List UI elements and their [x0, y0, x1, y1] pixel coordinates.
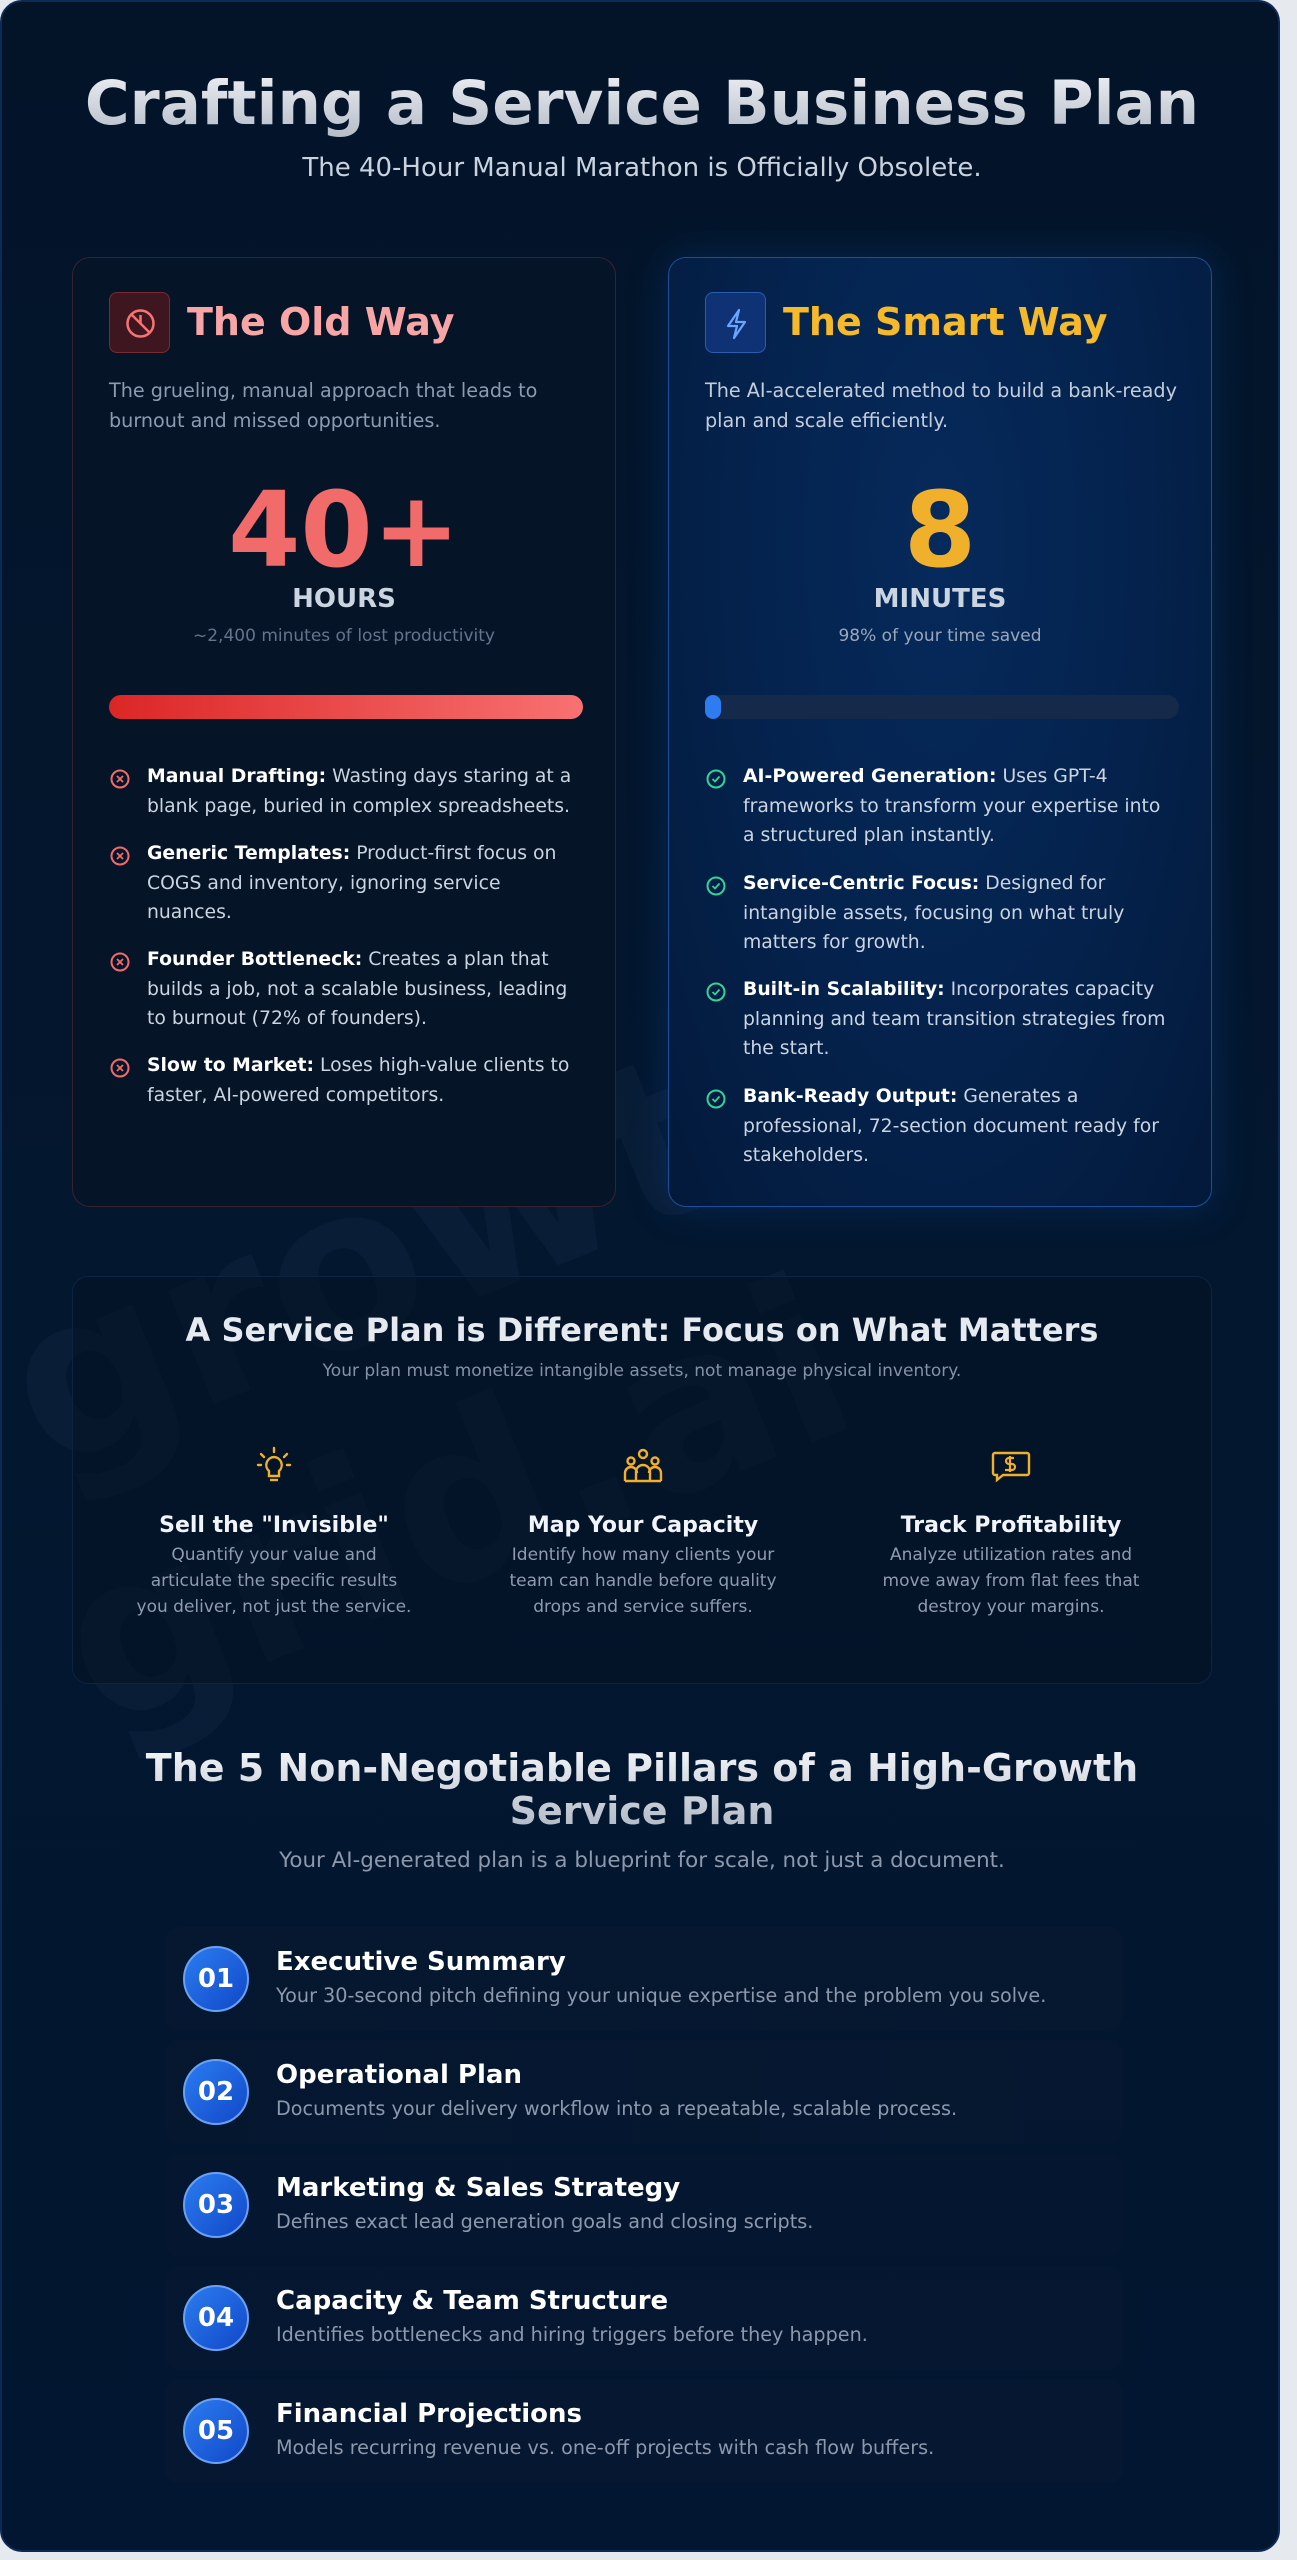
column: sell the invisible: Quantify your value and [171, 1545, 377, 1565]
description: plan and scale efficiently. [705, 409, 948, 432]
list: old way drawbacks: blank page, buried in complex spreadsheets. [147, 796, 570, 816]
list: old way drawbacks: faster, AI-powered competitors. [147, 1084, 444, 1106]
list: old way drawbacks [110, 766, 571, 1106]
pillar 02: Documents your delivery workflow into a repeatable, scalable process. [276, 2097, 957, 2120]
list: smart way benefits: a structured plan instantly. [743, 825, 995, 846]
title: Crafting a Service Business Plan [85, 68, 1199, 139]
icon: lightbulb [256, 1446, 292, 1482]
panel: smart way: 98% of your time saved [838, 626, 1042, 646]
list: smart way benefits: Service-Centric Focus: Designed for [743, 873, 1105, 894]
pillar 01: 01 [198, 1964, 234, 1994]
pillar 02: 02 [198, 2077, 234, 2107]
pillar 03: Defines exact lead generation goals and closing scripts. [276, 2210, 813, 2233]
description: The AI-accelerated method to build a bank-ready [705, 379, 1177, 402]
pillar 04: 04 [198, 2303, 234, 2333]
heading: the smart way: The Smart Way [783, 300, 1108, 344]
subheading: Your AI-generated plan is a blueprint for scale, not just a document. [279, 1848, 1005, 1873]
subheading: Your plan must monetize intangible assets, not manage physical inventory. [323, 1361, 961, 1381]
pillar 02: Operational Plan [276, 2060, 522, 2090]
column: track profitability: Track Profitability [901, 1513, 1121, 1538]
panel: smart way [668, 257, 1212, 1207]
icon: money chat [992, 1452, 1030, 1482]
column: map your capacity: team can handle before quality [509, 1571, 777, 1591]
icon: prohibited clock [109, 292, 170, 353]
column: map your capacity [509, 1448, 777, 1617]
pillar 01: Your 30-second pitch defining your unique expertise and the problem you solve. [276, 1984, 1046, 2007]
list: smart way benefits [706, 766, 1165, 1166]
pillar 03: Marketing & Sales Strategy [276, 2173, 680, 2203]
panel: old way [72, 257, 616, 1207]
column: map your capacity: Identify how many clients your [512, 1545, 774, 1565]
description [108, 379, 537, 432]
watermark [2, 2, 1282, 1702]
pillar 03: 03 [198, 2190, 234, 2220]
pillar 04: Capacity & Team Structure [276, 2286, 668, 2316]
heading: 5 pillars [2, 1747, 1282, 1833]
heading: 5 pillars: Service Plan [510, 1789, 774, 1833]
list: smart way benefits: stakeholders. [743, 1145, 869, 1166]
list: smart way benefits: frameworks to transform your expertise into [743, 796, 1160, 816]
list: smart way benefits: planning and team transition strategies from [743, 1008, 1165, 1030]
panel: old way: HOURS [292, 584, 396, 614]
column: sell the invisible: articulate the specific results [151, 1571, 397, 1591]
column: track profitability: move away from flat fees that [883, 1571, 1139, 1591]
heading: the old way: The Old Way [187, 300, 455, 344]
pillar 05: 05 [198, 2416, 234, 2446]
list: smart way benefits: matters for growth. [743, 932, 926, 953]
stat: 8 minutes: 8 [904, 469, 976, 591]
panel: smart way: MINUTES [874, 584, 1006, 614]
heading: A Service Plan is Different: Focus on What Matters [186, 1311, 1098, 1349]
column: track profitability [883, 1452, 1139, 1617]
list: old way drawbacks: builds a job, not a scalable business, leading [147, 978, 567, 1000]
list: old way drawbacks: COGS and inventory, ignoring service [147, 872, 501, 894]
pillar 04: Identifies bottlenecks and hiring triggers before they happen. [276, 2323, 868, 2346]
progress bar small [705, 695, 1179, 719]
column: sell the invisible: you deliver, not just the service. [137, 1597, 411, 1617]
column: track profitability: Analyze utilization rates and [890, 1545, 1132, 1565]
list: smart way benefits: Bank-Ready Output: Generates a [743, 1086, 1078, 1107]
panel: old way: ~2,400 minutes of lost productivity [193, 626, 495, 646]
column: sell the invisible: Sell the "Invisible" [159, 1513, 389, 1538]
description: burnout and missed opportunities. [109, 409, 441, 432]
list: smart way benefits: the start. [743, 1038, 830, 1059]
column: sell the invisible [137, 1446, 411, 1617]
column: map your capacity: drops and service suffers. [533, 1597, 753, 1617]
progress bar full [109, 695, 583, 719]
description [704, 379, 1177, 432]
icon: team [624, 1448, 662, 1482]
list: old way drawbacks: to burnout (72% of founders). [147, 1008, 427, 1029]
column: map your capacity: Map Your Capacity [528, 1513, 758, 1538]
list: smart way benefits: AI-Powered Generation: Uses GPT-4 [743, 766, 1108, 787]
list: smart way benefits: intangible assets, focusing on what truly [743, 902, 1124, 924]
list: smart way benefits: professional, 72-section document ready for [743, 1116, 1159, 1136]
pillar 01 [165, 1927, 1123, 2031]
pillar 03 [165, 2153, 1123, 2257]
panel: service plan is different [72, 1276, 1212, 1684]
watermark: grid.ai [23, 1228, 886, 1780]
list: old way drawbacks: Slow to Market: Loses high-value clients to [147, 1055, 569, 1076]
pillar 01: Executive Summary [276, 1947, 566, 1977]
pillar 02 [165, 2040, 1123, 2144]
heading: 5 pillars: The 5 Non-Negotiable Pillars of a High-Growth [146, 1746, 1138, 1790]
subtitle: The 40-Hour Manual Marathon is Officially Obsolete. [302, 153, 982, 183]
pillar 04 [165, 2266, 1123, 2370]
icon: lightning [705, 292, 766, 353]
stat: 40+ hours: 40+ [228, 469, 460, 591]
column: track profitability: destroy your margins. [917, 1597, 1105, 1617]
pillar 05 [165, 2379, 1123, 2483]
list: old way drawbacks: nuances. [147, 902, 232, 923]
list: old way drawbacks: Founder Bottleneck: Creates a plan that [147, 949, 549, 970]
list: smart way benefits: Built-in Scalability: Incorporates capacity [743, 979, 1154, 1000]
list: old way drawbacks: Manual Drafting: Wasting days staring at a [147, 766, 571, 787]
pillar 05: Models recurring revenue vs. one-off projects with cash flow buffers. [276, 2436, 934, 2459]
description: The grueling, manual approach that leads to [109, 379, 537, 402]
pillar 05: Financial Projections [276, 2399, 582, 2429]
list: old way drawbacks: Generic Templates: Product-first focus on [147, 843, 556, 864]
